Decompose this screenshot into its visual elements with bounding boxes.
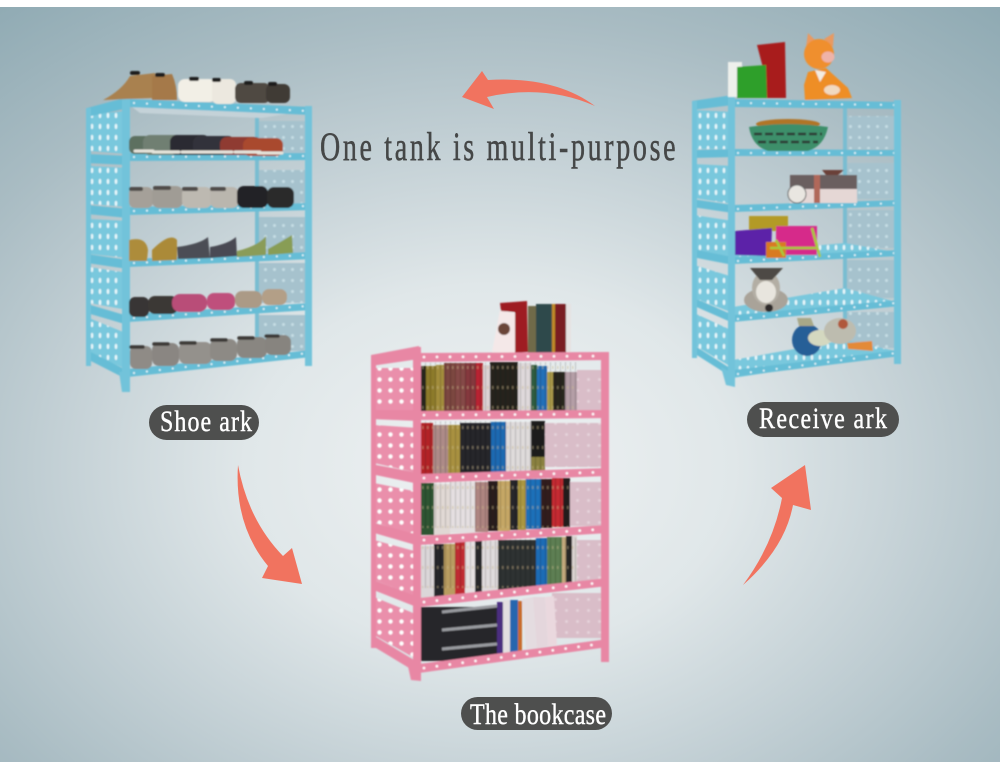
shelf surfaces [733, 243, 900, 378]
shelves of bookcase [371, 346, 608, 674]
item: orange cat [804, 33, 852, 100]
item: gift box [788, 170, 857, 203]
arrow: left [238, 465, 302, 584]
heading: One tank is multi-purpose [320, 125, 676, 169]
shelves of receive rack [692, 95, 900, 378]
shoes: row 6 [130, 335, 291, 369]
arrow: right [743, 465, 811, 585]
label: Receive ark: Receive ark [759, 401, 887, 435]
shoes: row 5 [129, 289, 287, 317]
posts of receive rack [692, 95, 901, 387]
arrow: top [462, 71, 595, 109]
left panels [374, 368, 418, 660]
books: row 5 [420, 596, 557, 661]
shoes: top row [103, 73, 290, 104]
posts of bookcase [371, 347, 609, 681]
shoes: row 3 [129, 186, 294, 208]
label: The bookcase: The bookcase [470, 697, 606, 731]
icon: pink bookcase [371, 301, 609, 681]
label: Shoe ark: Shoe ark [160, 404, 252, 438]
books: top stack [492, 301, 571, 354]
left panels [89, 111, 128, 370]
books: row 1 [420, 362, 577, 412]
books: row 4 [420, 536, 577, 598]
posts of shoe rack [86, 96, 312, 392]
back panels [257, 121, 306, 351]
back panels [845, 116, 895, 348]
shoes: row 4 [129, 235, 293, 261]
icon: blue shoe rack [86, 73, 312, 392]
item: plush donkey [744, 268, 788, 312]
item: green bag [737, 65, 767, 98]
item: stacked gifts [735, 216, 820, 258]
shoes: row 2 [129, 135, 283, 156]
shelf dots of bookcase [424, 356, 606, 668]
icon: blue receive rack [692, 33, 901, 387]
shelf dots of receive rack [738, 103, 896, 374]
item: basket [749, 119, 828, 151]
left panels [694, 110, 733, 368]
item: plush toys [792, 318, 873, 356]
books: row 3 [420, 478, 570, 535]
item: red boot [757, 42, 786, 98]
books: row 2 [420, 421, 545, 475]
item: white bag [728, 62, 742, 97]
right panels [545, 370, 602, 638]
shelves of shoe rack [87, 97, 311, 380]
top shelf surface [128, 104, 310, 118]
shelf dots of shoe rack [134, 103, 308, 373]
